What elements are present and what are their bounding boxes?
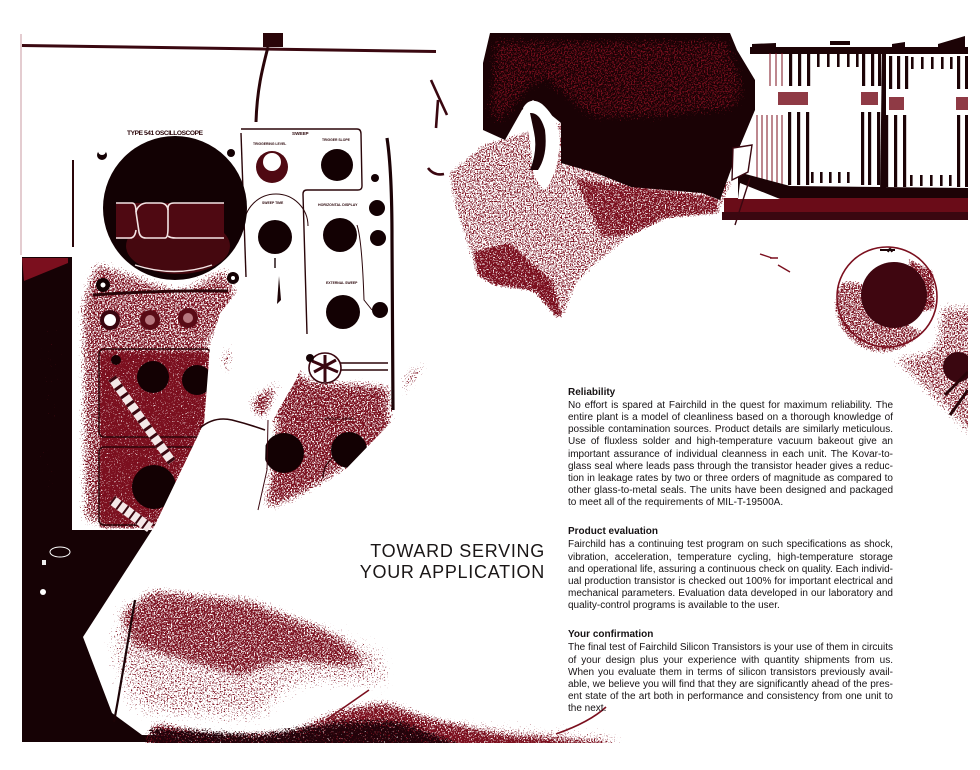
text block: reliability: glass seal where leads pass through the transistor header gives a reduc- [568, 461, 893, 472]
operator's head [428, 33, 755, 320]
panel labels: HORIZONTAL DISPLAY [318, 203, 358, 207]
maker's logo stamp [306, 353, 341, 383]
sleeve folds and shading [0, 583, 980, 770]
panel labels: VERTICAL SIGNAL [324, 417, 355, 421]
rack colour squares [778, 92, 969, 110]
text block: reliability: No effort is spared at Fairchild in the quest for maximum reliability. The [568, 400, 893, 411]
text block: your confirmation: Your confirmation [568, 629, 653, 640]
text block: reliability: possible contamination sources. Product details are similarly meticulous. [568, 424, 893, 435]
text block: product evaluation: Product evaluation [568, 526, 658, 537]
ear [523, 101, 560, 190]
text block: your confirmation: able, we believe you will find that they are significantly ahead of the pres- [568, 679, 893, 690]
round meter dial [833, 247, 937, 354]
text block: product evaluation: Fairchild has a continuing test program on such specifications as shock, [568, 539, 893, 550]
panel labels: EXTERNAL SWEEP [326, 281, 358, 285]
hanging wire [732, 145, 752, 225]
text block: your confirmation: When you evaluate them in terms of silicon transistors previously avail- [568, 667, 893, 678]
dark cabinet at left [22, 257, 175, 742]
panel labels: TYPE 541 OSCILLOSCOPE [127, 130, 204, 137]
text block: product evaluation: ual production transistor is checked out 100% for important electrical and [568, 576, 893, 587]
background electronic equipment [722, 0, 980, 770]
wall rail and conduit [21, 33, 436, 255]
text block: reliability [568, 386, 894, 508]
headline: TOWARD SERVING [370, 541, 545, 561]
headline [360, 541, 545, 582]
hair grain [483, 33, 752, 130]
text block: your confirmation: ent state of the art both in performance and consistency from one unit to [568, 691, 893, 702]
panel labels: TRIGGER SLOPE [322, 138, 351, 142]
panel labels: SWEEP [292, 131, 309, 136]
text block: product evaluation [568, 526, 893, 611]
scope screen [103, 136, 247, 280]
text block: reliability: tion in leakage rates by two or three orders of magnitude as compared to [568, 473, 893, 484]
panel mottled lower shading [76, 255, 442, 530]
hair [483, 33, 755, 200]
text block: reliability: to meet all of the requirements of MIL-T-19500A. [568, 497, 783, 508]
text block: product evaluation: mechanical parameters. Evaluation data developed in our laboratory and [568, 588, 893, 599]
face and neck stipple [446, 120, 735, 320]
wristwatch band [200, 419, 265, 430]
text block: reliability: important assurance of individual cleanness in each unit. The Kovar-to- [568, 449, 893, 460]
text block: product evaluation: and operational life, assuring a continuous check on quality. Each individ- [568, 564, 893, 575]
text block: reliability: Reliability [568, 386, 615, 398]
panel outlines [73, 129, 393, 525]
text block: your confirmation [568, 629, 893, 714]
rack stripes [757, 53, 968, 187]
text block: your confirmation: The final test of Fairchild Silicon Transistors is your use of them in circuits [568, 642, 893, 653]
text block: reliability: entire plant is a model of cleanliness based on a thorough knowledge of [568, 412, 893, 423]
text block: your confirmation: of your design plus your experience with quantity shipments from us. [568, 655, 893, 666]
hand [204, 272, 307, 428]
text block: product evaluation: quality-control programs is available to the user. [568, 600, 780, 611]
control knobs [96, 147, 388, 509]
text block: your confirmation: the next. [568, 703, 606, 714]
rack top bar [750, 36, 968, 54]
text block: reliability: Use of fluxless solder and high-temperature vacuum bakeout give an [568, 436, 893, 447]
panel labels [127, 130, 358, 421]
panel labels: TRIGGERING LEVEL [253, 142, 286, 146]
bench shelf [738, 172, 968, 198]
oscilloscope front panel [73, 129, 442, 530]
text block: reliability: other glass-to-metal seals. The units have been designed and packaged [568, 485, 893, 496]
lower right panel corner [880, 300, 980, 458]
panel labels: SWEEP TIME [262, 201, 284, 205]
operator's white arm and shirt [83, 219, 980, 742]
headline: YOUR APPLICATION [360, 562, 545, 582]
probe cables [112, 378, 172, 528]
text block: product evaluation: vibration, acceleration, temperature cycling, high-temperature storage [568, 552, 893, 563]
spectacle arm fragments [428, 80, 447, 174]
